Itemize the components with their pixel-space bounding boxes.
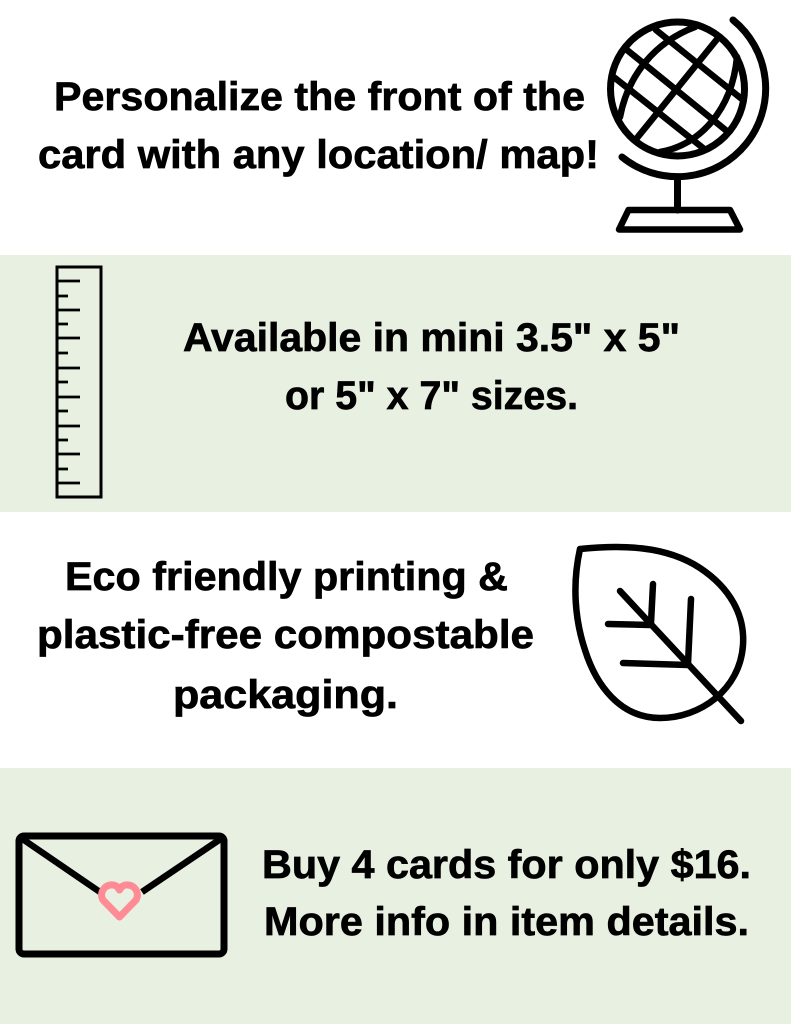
panel: eco friendly — [0, 512, 791, 768]
text: eco friendly — [37, 555, 534, 717]
icon: heart — [102, 885, 137, 917]
text: eco friendly: Eco friendly printing & — [65, 555, 508, 599]
text: sizes — [183, 316, 680, 418]
panel: personalize — [0, 0, 791, 255]
text: offer: More info in item details. — [264, 900, 749, 944]
text: eco friendly: packaging. — [173, 673, 398, 717]
text: offer: Buy 4 cards for only $16. — [262, 843, 751, 887]
icon: envelope — [19, 836, 224, 954]
text: personalize: Personalize the front of the — [54, 75, 585, 119]
text: sizes: or 5" x 7" sizes. — [285, 374, 578, 418]
icon: ruler — [57, 267, 101, 497]
text: personalize — [38, 75, 599, 177]
text: personalize: card with any location/ map! — [38, 133, 599, 177]
text: sizes: Available in mini 3.5" x 5" — [183, 316, 680, 360]
panel: offer — [0, 768, 791, 1024]
panel: sizes — [0, 255, 791, 512]
icon: globe — [610, 20, 766, 230]
text: eco friendly: plastic-free compostable — [37, 613, 534, 657]
icon: leaf — [575, 547, 743, 721]
text: offer — [262, 843, 751, 944]
